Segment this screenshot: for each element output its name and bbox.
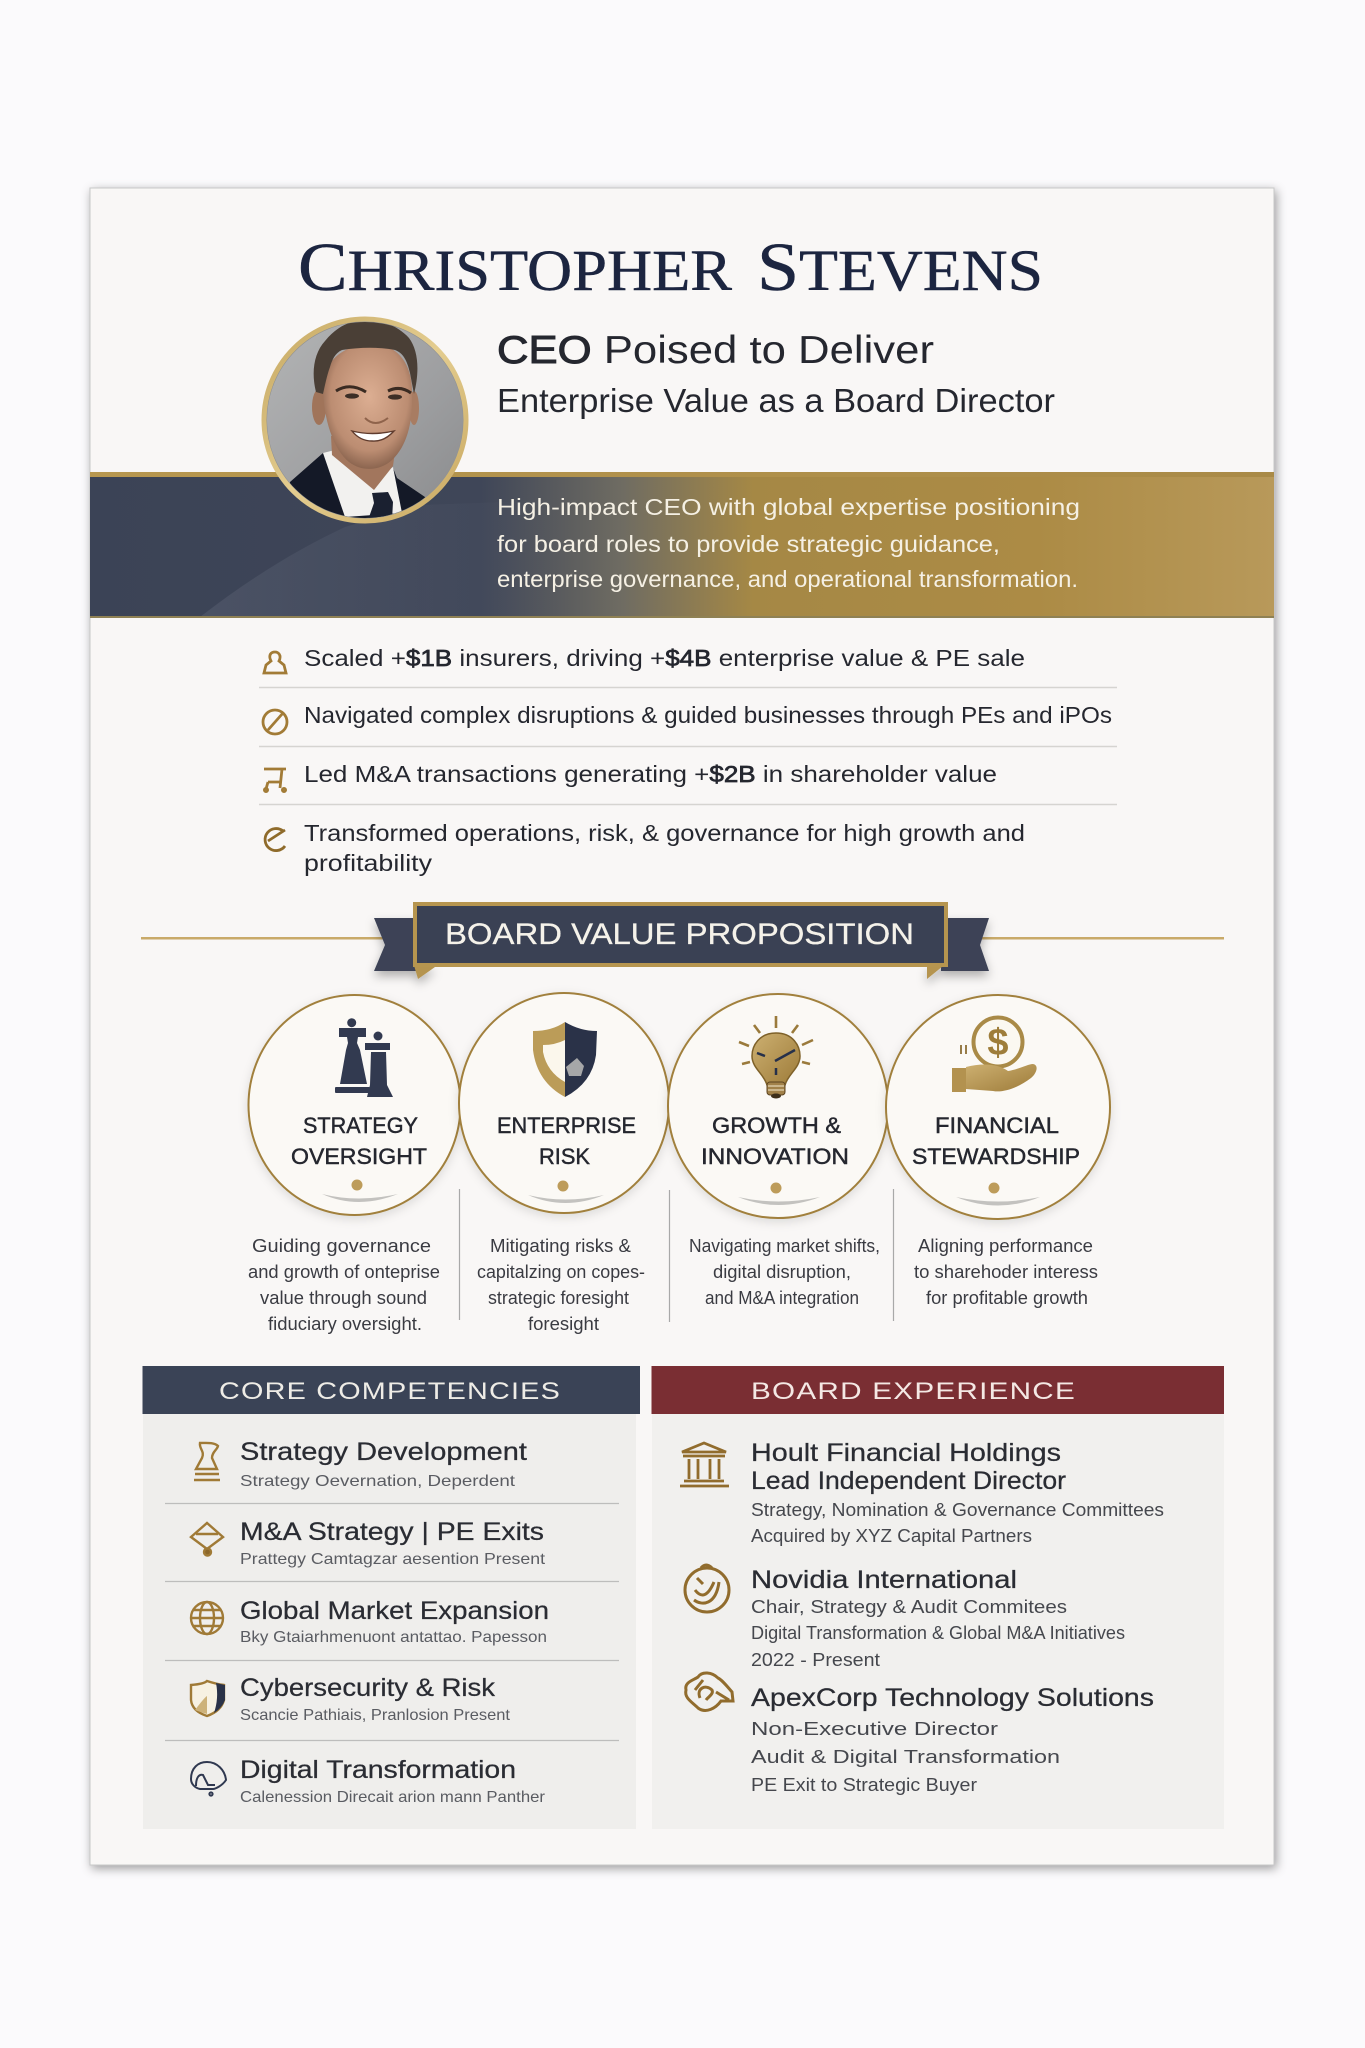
icon: light bulb — [739, 1016, 813, 1098]
text: growth description: and M&A integration — [705, 1288, 859, 1308]
subtitle: CEO Poised to Deliver — [497, 329, 934, 372]
text: growth description: digital disruption, — [713, 1262, 851, 1282]
dot — [988, 1182, 1000, 1194]
panel: financial stewardship: FINANCIAL — [935, 1113, 1059, 1138]
achievement bullets — [263, 645, 1112, 876]
text: strategy description — [248, 1236, 440, 1334]
portrait — [264, 319, 466, 530]
heading: board experience: BOARD EXPERIENCE — [751, 1378, 1076, 1405]
summary band — [90, 472, 1274, 618]
icon: hand holding coin: $ — [987, 1022, 1009, 1064]
text: strategy description: fiduciary oversight. — [268, 1314, 422, 1334]
dot — [770, 1182, 782, 1194]
icon: apex emblem — [686, 1673, 733, 1710]
panel: growth and innovation: INNOVATION — [701, 1144, 849, 1169]
title: name — [298, 229, 1043, 305]
text: financial description — [914, 1236, 1098, 1308]
icon: digital device — [191, 1762, 226, 1796]
item: global market expansion — [191, 1597, 549, 1646]
bullet 4: Transformed operations, risk, & governance for high growth and — [304, 820, 1025, 846]
summary text: High-impact CEO with global expertise positioning — [497, 494, 1080, 520]
item: apexcorp technology solutions: Non-Executive Director — [751, 1719, 998, 1739]
item: hoult financial holdings: Lead Independent Director — [751, 1467, 1066, 1495]
item: strategy development: Strategy Oevernation, Deperdent — [240, 1473, 516, 1490]
shirt — [323, 450, 402, 517]
item: cybersecurity and risk: Scancie Pathiais, Pranlosion Present — [240, 1707, 511, 1724]
item: strategy development: Strategy Development — [240, 1438, 527, 1466]
icon: bank — [680, 1443, 729, 1486]
summary text: for board roles to provide strategic guidance, — [497, 531, 1000, 557]
bullet 1: Scaled + $1B insurers, driving + $4B enterprise value & PE sale — [304, 645, 1025, 671]
panel: enterprise risk: RISK — [539, 1144, 590, 1169]
heading: core competencies — [142, 1366, 640, 1414]
summary text — [497, 494, 1080, 592]
item: apexcorp technology solutions: ApexCorp Technology Solutions — [751, 1684, 1154, 1712]
title: name: STEVENS — [757, 229, 1043, 305]
panel: strategy oversight: OVERSIGHT — [291, 1144, 427, 1169]
eyes and brows — [336, 387, 411, 393]
heading: board value proposition ribbon: BOARD VALUE PROPOSITION — [445, 918, 914, 951]
text: risk description: capitalzing on copes- — [477, 1262, 645, 1282]
subtitle — [497, 329, 1055, 419]
item: hoult financial holdings: Acquired by XYZ Capital Partners — [751, 1526, 1032, 1546]
panel: strategy oversight — [248, 995, 460, 1215]
item: cybersecurity and risk: Cybersecurity & Risk — [240, 1674, 496, 1702]
bullet 4: profitability — [304, 850, 433, 876]
item: m&a strategy: Prattegy Camtagzar aesention Present — [240, 1551, 546, 1568]
text: growth description — [689, 1236, 880, 1308]
text: strategy description: value through sound — [260, 1288, 427, 1308]
neck — [331, 436, 394, 490]
text: financial description: to sharehoder interess — [914, 1262, 1098, 1282]
smile — [352, 431, 394, 441]
item: digital transformation: Calenession Direcait arion mann Panther — [240, 1789, 546, 1806]
text: financial description: for profitable growth — [926, 1288, 1088, 1308]
heading: board experience — [652, 1366, 1224, 1414]
item: novidia international — [685, 1565, 1125, 1670]
item: m&a strategy — [191, 1518, 546, 1568]
item: hoult financial holdings: Hoult Financial Holdings — [751, 1439, 1061, 1467]
nose — [365, 418, 388, 423]
item: m&a strategy: M&A Strategy | PE Exits — [240, 1518, 544, 1546]
item: apexcorp technology solutions — [686, 1673, 1154, 1795]
icon: hand holding coin — [952, 1018, 1037, 1092]
text: risk description: Mitigating risks & — [490, 1236, 631, 1256]
tie — [368, 492, 393, 520]
item: apexcorp technology solutions: PE Exit to Strategic Buyer — [751, 1775, 977, 1795]
item: digital transformation: Digital Transformation — [240, 1756, 516, 1784]
text: risk description: strategic foresight — [488, 1288, 629, 1308]
panel: enterprise risk — [459, 993, 669, 1213]
item: apexcorp technology solutions: Audit & Digital Transformation — [751, 1747, 1060, 1767]
icon: diamond — [191, 1523, 223, 1556]
bullet 2: Navigated complex disruptions & guided businesses through PEs and iPOs — [304, 702, 1112, 728]
infographic page — [85, 184, 1283, 1875]
icon: chess pieces — [335, 1018, 393, 1097]
icon: deal cart — [264, 769, 286, 792]
item: hoult financial holdings: Strategy, Nomination & Governance Committees — [751, 1500, 1164, 1520]
text: strategy description: and growth of onteprise — [248, 1262, 440, 1282]
bullet 4 — [265, 820, 1025, 876]
face — [323, 344, 412, 469]
panel: growth and innovation — [668, 994, 888, 1218]
paper card — [90, 188, 1274, 1865]
icon: compass circle — [263, 710, 287, 734]
subtitle: Enterprise Value as a Board Director — [497, 382, 1055, 419]
icon: shield — [533, 1022, 597, 1097]
item: cybersecurity and risk — [191, 1674, 511, 1724]
text: financial description: Aligning performance — [918, 1236, 1093, 1256]
item: global market expansion: Global Market Expansion — [240, 1597, 549, 1625]
text: strategy description: Guiding governance — [252, 1236, 431, 1256]
icon: chess pawn — [194, 1443, 220, 1480]
icon: globe — [191, 1602, 223, 1634]
bullet 3: Led M&A transactions generating + $2B in shareholder value — [304, 761, 997, 787]
dot — [352, 1180, 362, 1190]
item: digital transformation — [191, 1756, 546, 1806]
heading: board value proposition ribbon — [141, 904, 1224, 979]
panel: growth and innovation: GROWTH & — [712, 1113, 841, 1138]
panel: financial stewardship — [886, 995, 1110, 1219]
hair — [314, 320, 417, 394]
ribbon tails — [374, 918, 989, 979]
text: risk description — [477, 1236, 645, 1334]
icon: shield — [191, 1681, 225, 1716]
item: global market expansion: Bky Gtaiarhmenuont antattao. Papesson — [240, 1629, 547, 1646]
icon: stamp person — [264, 652, 286, 673]
item: strategy development — [194, 1438, 527, 1490]
title: name: CHRISTOPHER — [298, 229, 732, 305]
ears — [312, 389, 326, 425]
dot — [558, 1180, 568, 1192]
text: risk description: foresight — [528, 1314, 599, 1334]
panel: enterprise risk: ENTERPRISE — [497, 1113, 636, 1138]
icon: check circle — [265, 829, 285, 851]
heading: core competencies: CORE COMPETENCIES — [219, 1378, 561, 1405]
panel: financial stewardship: STEWARDSHIP — [912, 1144, 1080, 1169]
panel: strategy oversight: STRATEGY — [303, 1113, 418, 1138]
suit — [290, 453, 426, 518]
text: growth description: Navigating market shifts, — [689, 1236, 880, 1256]
item: novidia international: Chair, Strategy & Audit Commitees — [751, 1597, 1067, 1617]
panel: core competencies — [142, 1366, 640, 1829]
item: hoult financial holdings — [680, 1439, 1164, 1546]
item: novidia international: Novidia International — [751, 1566, 1017, 1594]
summary text: enterprise governance, and operational transformation. — [497, 566, 1078, 592]
icon: novidia emblem — [685, 1565, 729, 1612]
panel: board experience — [652, 1366, 1224, 1829]
item: novidia international: Digital Transformation & Global M&A Initiatives — [751, 1623, 1125, 1643]
item: novidia international: 2022 - Present — [751, 1650, 880, 1670]
